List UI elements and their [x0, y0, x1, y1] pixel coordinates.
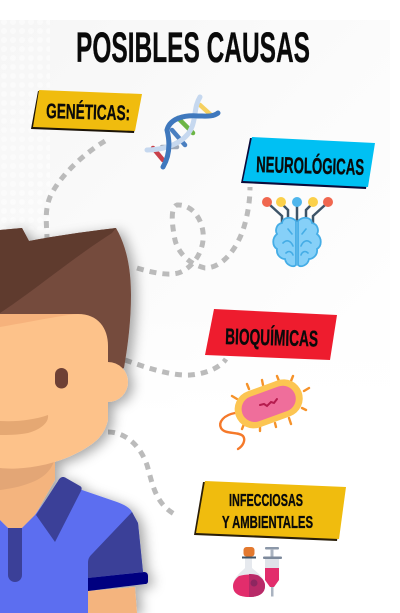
collar: [36, 477, 82, 542]
icon: dna: [147, 97, 218, 167]
label: infecciosas y ambientales: [194, 481, 346, 541]
shirt placket: [8, 528, 22, 582]
hair dark: [0, 228, 116, 313]
mouth: [0, 415, 48, 435]
sleeve band: [88, 572, 148, 591]
character: boy: [0, 228, 148, 613]
dashed path: neurological to head: [137, 187, 250, 274]
label: bioquimicas: [205, 309, 337, 360]
icon: syringe: [263, 547, 282, 596]
shirt: [0, 480, 143, 613]
neck shadow: [0, 458, 55, 490]
arm: [88, 587, 137, 613]
eye: [55, 368, 68, 388]
face: [0, 314, 108, 469]
dashed path: biochemical to head: [125, 359, 226, 375]
label: bioquimicas: BIOQUÍMICAS: [225, 324, 318, 351]
dashed path: genetics to head: [46, 141, 105, 240]
icon: brain: [262, 197, 333, 266]
neck: [0, 460, 55, 528]
ear: [88, 362, 128, 402]
sleeve: [88, 512, 143, 578]
label: geneticas: GENÉTICAS:: [46, 100, 130, 125]
dashed path: infectious to shoulder: [108, 432, 178, 516]
forehead shade: [0, 314, 78, 327]
label: geneticas: [31, 90, 142, 133]
label: infecciosas y ambientales: INFECCIOSAS: [229, 490, 303, 510]
label: neurologicas: [241, 137, 375, 189]
icon: bacterium: [220, 374, 309, 449]
icon: flask: [233, 547, 265, 597]
label: infecciosas y ambientales: Y AMBIENTALES: [222, 512, 313, 532]
hair back: [0, 228, 131, 380]
